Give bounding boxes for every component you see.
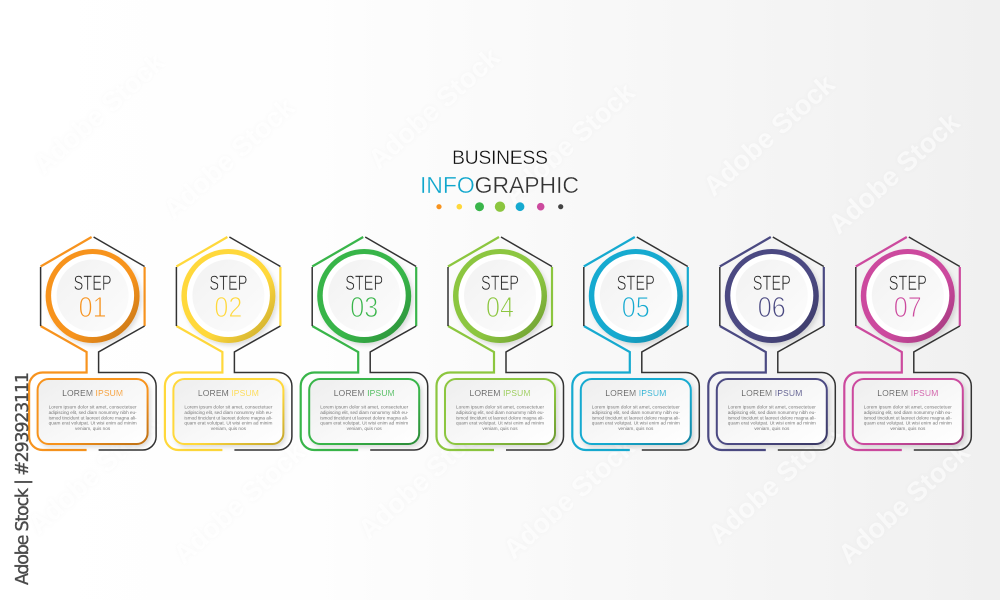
hexagon frame	[844, 237, 971, 450]
hexagon frame	[301, 237, 428, 450]
text panel: quam erat volutpat. Ut wisi enim ad minim	[592, 420, 680, 426]
text panel: LOREM IPSUM	[741, 388, 802, 398]
circle badge: 07	[894, 292, 922, 324]
watermarks: Adobe Stock	[28, 46, 171, 180]
text panel: LOREM IPSUM	[605, 388, 666, 398]
watermarks: Adobe Stock	[353, 411, 496, 545]
text panel: Lorem ipsum dolor sit amet, consectetuer	[728, 404, 816, 410]
circle badge: 05	[622, 292, 650, 324]
text panel: adipiscing elit, sed diam nonummy nibh eu-	[49, 410, 137, 415]
text panel: veniam, quis nos	[211, 426, 247, 431]
circle badge	[317, 249, 411, 343]
circle badge: 06	[758, 292, 786, 324]
heading: infographic: INFOGRAPHIC	[420, 172, 579, 198]
text panel: veniam, quis nos	[75, 426, 111, 431]
step 07	[844, 237, 971, 450]
text panel: veniam, quis nos	[347, 426, 382, 431]
hexagon frame	[436, 237, 564, 450]
watermarks: Adobe Stock	[833, 436, 976, 570]
text panel: adipiscing elit, sed diam nonummy nibh eu-	[184, 410, 273, 415]
watermarks: Adobe Stock	[363, 41, 506, 175]
text panel	[581, 379, 691, 444]
text panel: Lorem ipsum dolor sit amet, consectetuer	[184, 404, 273, 410]
text panel: quam erat volutpat. Ut wisi enim ad minim	[456, 420, 544, 426]
text panel: adipiscing elit, sed diam nonummy nibh eu-	[320, 410, 409, 415]
watermarks: Adobe Stock	[703, 416, 846, 550]
text panel	[445, 379, 555, 444]
title	[420, 147, 579, 212]
text panel: ismod tincidunt ut laoreet dolore magna ali-	[592, 415, 680, 420]
text panel: LOREM IPSUM	[62, 388, 123, 398]
hexagon frame	[29, 237, 156, 450]
text panel: LOREM IPSUM	[877, 388, 938, 398]
circle badge	[181, 249, 275, 343]
circle badge: STEP	[345, 272, 383, 295]
text panel: adipiscing elit, sed diam nonummy nibh eu-	[592, 410, 680, 415]
watermarks: Adobe Stock	[498, 431, 641, 565]
step 01	[29, 237, 156, 450]
text panel: ismod tincidunt ut laoreet dolore magna ali-	[864, 415, 952, 420]
circle badge	[725, 249, 819, 343]
text panel	[853, 379, 963, 444]
watermarks: Adobe Stock	[823, 106, 966, 240]
text panel: veniam, quis nos	[890, 426, 926, 431]
hexagon frame	[708, 237, 835, 450]
circle badge	[46, 249, 140, 343]
text panel: ismod tincidunt ut laoreet dolore magna ali-	[320, 415, 409, 420]
circle badge: STEP	[889, 272, 927, 295]
step 05	[572, 237, 699, 450]
circle badge: STEP	[209, 272, 247, 295]
text panel: adipiscing elit, sed diam nonummy nibh eu-	[728, 410, 816, 415]
text panel	[173, 379, 283, 444]
text panel: Lorem ipsum dolor sit amet, consectetuer	[49, 404, 137, 410]
hexagon frame	[165, 237, 292, 450]
text panel: LOREM IPSUM	[470, 388, 530, 398]
circle badge: STEP	[481, 272, 519, 295]
circle badge: STEP	[74, 272, 112, 295]
watermarks: Adobe Stock	[158, 91, 301, 225]
text panel: veniam, quis nos	[618, 426, 654, 431]
circle badge: STEP	[617, 272, 655, 295]
text panel: Lorem ipsum dolor sit amet, consectetuer	[456, 404, 544, 410]
text panel: quam erat volutpat. Ut wisi enim ad minim	[49, 420, 137, 426]
text panel: quam erat volutpat. Ut wisi enim ad minim	[728, 420, 816, 426]
circle badge: 04	[486, 292, 514, 324]
text panel: quam erat volutpat. Ut wisi enim ad minim	[320, 420, 408, 426]
watermarks: Adobe Stock	[23, 406, 166, 540]
circle badge	[589, 249, 683, 343]
text panel: quam erat volutpat. Ut wisi enim ad minim	[864, 420, 952, 426]
text panel	[38, 379, 148, 444]
text panel: adipiscing elit, sed diam nonummy nibh eu-	[864, 410, 952, 415]
step 03	[301, 237, 428, 450]
text panel: Lorem ipsum dolor sit amet, consectetuer	[592, 404, 680, 410]
circle badge: 01	[79, 292, 107, 324]
watermarks: Adobe Stock	[498, 76, 641, 210]
watermarks: Adobe Stock	[698, 68, 841, 202]
stock credit: Adobe Stock | #293923111	[13, 372, 33, 585]
circle badge	[861, 249, 955, 343]
text panel	[309, 379, 419, 444]
circle badge	[453, 249, 547, 343]
text panel: ismod tincidunt ut laoreet dolore magna ali-	[728, 415, 816, 420]
circle badge: 03	[350, 292, 378, 324]
text panel: veniam, quis nos	[754, 426, 790, 431]
text panel: Lorem ipsum dolor sit amet, consectetuer	[320, 404, 409, 410]
text panel: LOREM IPSUM	[198, 388, 259, 398]
watermarks: Adobe Stock	[168, 436, 311, 570]
text panel	[717, 379, 827, 444]
step 04	[436, 237, 564, 450]
step 06	[708, 237, 835, 450]
colour dots	[436, 202, 563, 212]
text panel: quam erat volutpat. Ut wisi enim ad minim	[184, 420, 272, 426]
text panel: LOREM IPSUM	[334, 388, 395, 398]
heading: business: BUSINESS	[452, 147, 548, 169]
text panel: ismod tincidunt ut laoreet dolore magna ali-	[456, 415, 544, 420]
step 02	[165, 237, 292, 450]
text panel: ismod tincidunt ut laoreet dolore magna ali-	[184, 415, 273, 420]
text panel: Lorem ipsum dolor sit amet, consectetuer	[864, 404, 952, 410]
text panel: veniam, quis nos	[482, 426, 518, 431]
circle badge: 02	[214, 292, 242, 324]
circle badge: STEP	[753, 272, 791, 295]
hexagon frame	[572, 237, 699, 450]
text panel: adipiscing elit, sed diam nonummy nibh eu-	[456, 410, 544, 415]
text panel: ismod tincidunt ut laoreet dolore magna ali-	[49, 415, 137, 420]
